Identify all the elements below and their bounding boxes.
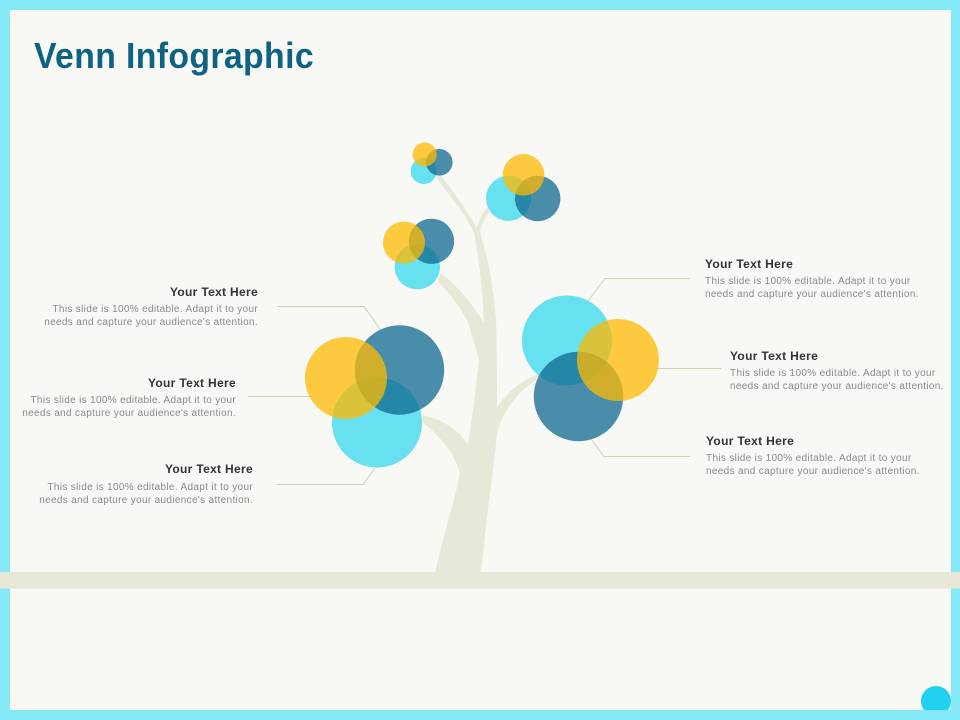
- right text block 1: [705, 257, 919, 300]
- left text block 2: needs and capture your audience's attention.: [22, 408, 236, 419]
- right text block 1: This slide is 100% editable. Adapt it to your: [705, 276, 911, 287]
- venn cluster: top right: [486, 154, 560, 221]
- venn cluster: large left: [305, 325, 444, 468]
- right text block 3: [706, 434, 920, 477]
- right text block 2: Your Text Here: [730, 349, 818, 363]
- left text block 2: This slide is 100% editable. Adapt it to your: [30, 395, 236, 406]
- right text block 2: [730, 349, 944, 392]
- left text block 3: Your Text Here: [165, 462, 253, 476]
- right text block 1: Your Text Here: [705, 257, 793, 271]
- left text block 1: needs and capture your audience's attention.: [44, 317, 258, 328]
- corner accent circle: [921, 686, 951, 710]
- right text block 3: needs and capture your audience's attention.: [706, 466, 920, 477]
- right text block 2: This slide is 100% editable. Adapt it to your: [730, 368, 936, 379]
- leader lines: [248, 278, 721, 484]
- left text block 3: This slide is 100% editable. Adapt it to your: [47, 482, 253, 493]
- right text block 3: Your Text Here: [706, 434, 794, 448]
- venn cluster: large right: [522, 296, 659, 441]
- venn cluster: small top: [411, 142, 453, 184]
- left text block 1: Your Text Here: [170, 285, 258, 299]
- right text block 2: needs and capture your audience's attention.: [730, 381, 944, 392]
- title: Venn Infographic: [34, 35, 314, 76]
- right text block 1: needs and capture your audience's attention.: [705, 289, 919, 300]
- ground bar: [0, 572, 960, 588]
- venn cluster: upper left: [383, 219, 454, 289]
- left text block 1: [44, 285, 258, 328]
- left text block 3: [39, 462, 253, 506]
- left text block 2: [22, 376, 236, 419]
- left text block 2: Your Text Here: [148, 376, 236, 390]
- right text block 3: This slide is 100% editable. Adapt it to your: [706, 453, 912, 464]
- tree trunk and branches: [422, 175, 537, 573]
- left text block 3: needs and capture your audience's attention.: [39, 495, 253, 506]
- left text block 1: This slide is 100% editable. Adapt it to your: [52, 304, 258, 315]
